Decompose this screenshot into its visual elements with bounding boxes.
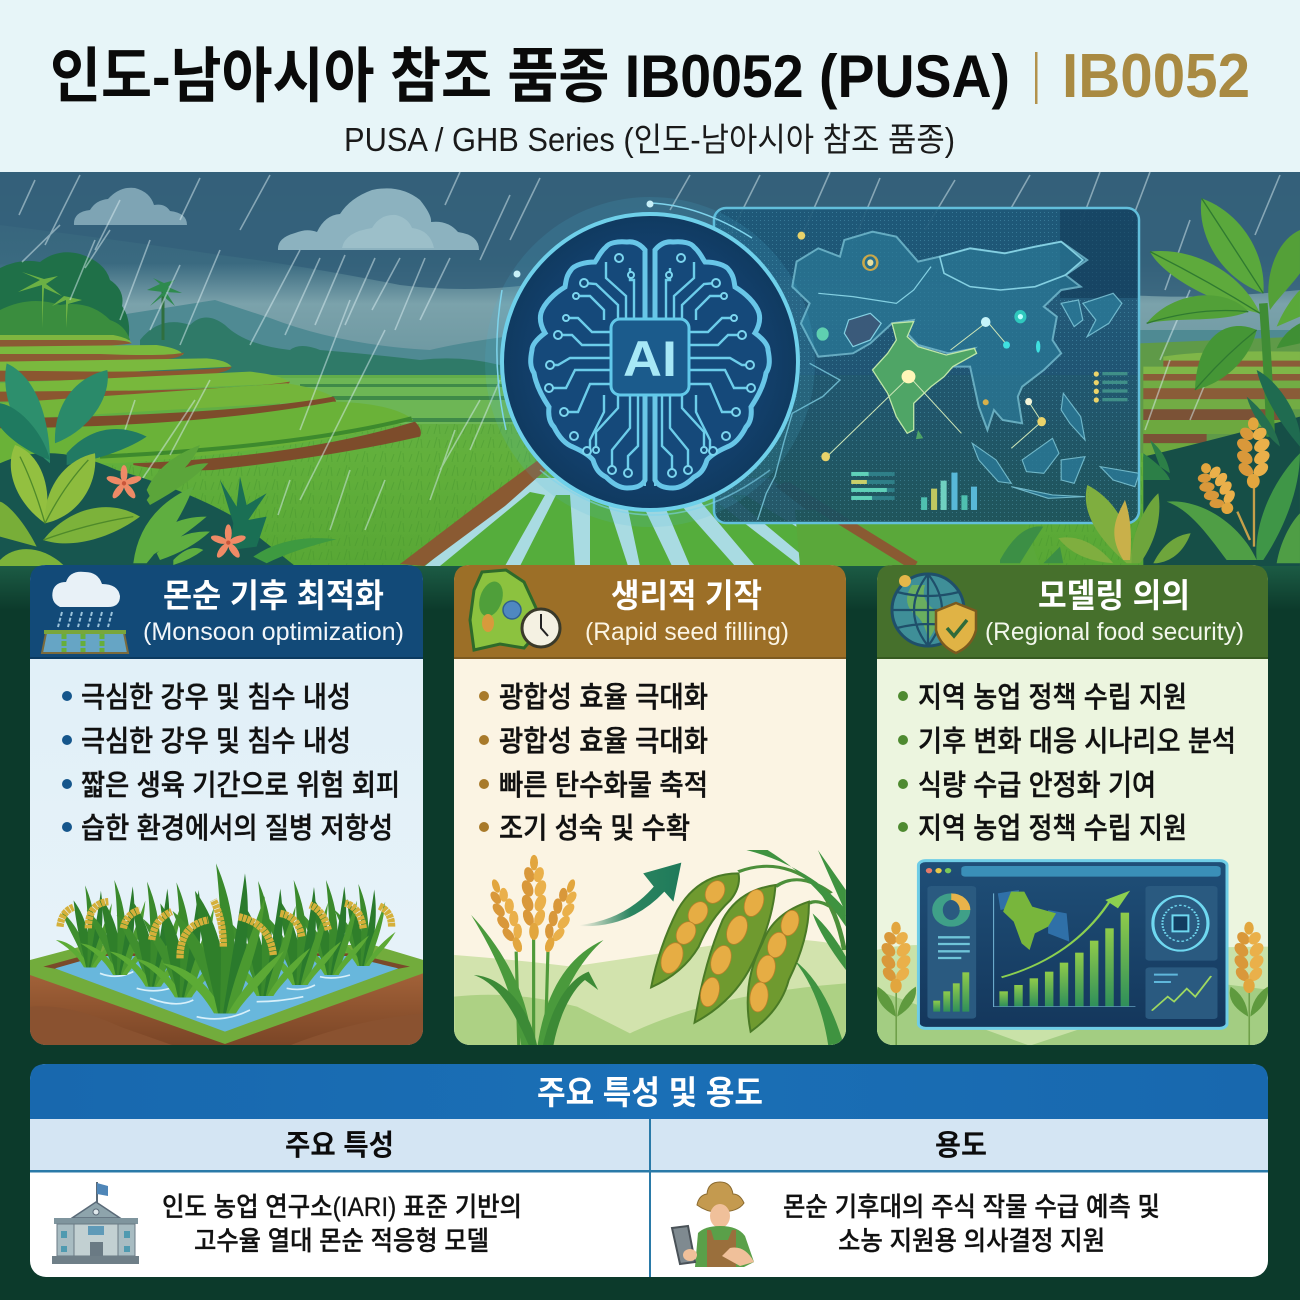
pod seeds bbox=[657, 877, 802, 1013]
rain bbox=[19, 172, 1280, 530]
panel header bbox=[454, 565, 846, 658]
icon: globe with shield bbox=[892, 574, 976, 653]
text: uses bbox=[783, 1192, 1160, 1256]
icon: farmer with tablet bbox=[672, 1182, 754, 1267]
side wheat ears bbox=[879, 922, 1266, 993]
bullet list: 조기 성숙 및 수확 bbox=[499, 812, 690, 845]
bullet list bbox=[62, 681, 400, 845]
bullet list: 짧은 생육 기간으로 위험 회피 bbox=[81, 769, 400, 802]
AI chip: AI bbox=[623, 331, 677, 387]
side wheat stems bbox=[877, 987, 1268, 1047]
bushes in front of map bbox=[1000, 485, 1191, 563]
dark cloud band bbox=[266, 261, 1300, 297]
network links bbox=[827, 322, 1042, 457]
left tree cluster bbox=[0, 252, 182, 342]
stalk and leaves bbox=[738, 866, 844, 950]
wheat ears bbox=[490, 854, 576, 952]
panel header bbox=[30, 565, 423, 658]
table: key traits and uses bbox=[30, 1064, 1268, 1277]
text: key traits: 고수율 열대 몬순 적응형 모델 bbox=[194, 1226, 489, 1256]
panel subtitle: (Regional food security) bbox=[985, 618, 1244, 646]
AI chip bbox=[611, 319, 689, 395]
clouds bbox=[74, 188, 479, 250]
hero scene bbox=[0, 172, 1300, 575]
panel: physiological mechanism bbox=[454, 565, 846, 1047]
bullet list bbox=[479, 681, 708, 845]
table title bar: 주요 특성 및 용도 bbox=[537, 1074, 763, 1111]
left foreground foliage bbox=[0, 363, 337, 570]
illustration: flooded rice paddy bbox=[30, 863, 423, 1047]
mini line chart bbox=[1154, 975, 1178, 982]
illustration: grain and seed pods bbox=[454, 850, 846, 1047]
bullet list bbox=[898, 681, 1236, 845]
title divider bbox=[1035, 52, 1038, 104]
title: 인도-남아시아 참조 품종 IB0052 (PUSA) bbox=[50, 43, 1010, 110]
bullet list: 식량 수급 안정화 기여 bbox=[918, 769, 1156, 802]
fade under hero bbox=[0, 560, 1300, 610]
bullet list: 기후 변화 대응 시나리오 분석 bbox=[918, 725, 1236, 758]
text: key traits bbox=[162, 1192, 522, 1256]
panel subtitle: (Rapid seed filling) bbox=[585, 618, 789, 646]
title code: IB0052 bbox=[1062, 42, 1250, 111]
bullet list: 습한 환경에서의 질병 저항성 bbox=[81, 812, 393, 845]
mini india map bbox=[998, 890, 1069, 942]
mini bar chart bbox=[921, 473, 977, 510]
far tree line bbox=[140, 318, 500, 375]
AI brain orb bbox=[485, 197, 815, 527]
bullet list: 광합성 효율 극대화 bbox=[499, 725, 708, 758]
mini bar list bbox=[851, 472, 895, 500]
panel subtitle: (Monsoon optimization) bbox=[143, 618, 404, 646]
bullet list: 지역 농업 정책 수립 지원 bbox=[918, 681, 1187, 714]
main bar chart bbox=[994, 893, 1135, 1007]
map nodes bbox=[797, 232, 1046, 461]
panel heading: 생리적 기작 bbox=[611, 577, 762, 614]
dashboard screen bbox=[918, 861, 1227, 1028]
mini brain bbox=[1153, 896, 1208, 951]
panel header bbox=[877, 565, 1268, 658]
green rice field bbox=[0, 375, 1144, 566]
bullet list: 극심한 강우 및 침수 내성 bbox=[81, 725, 351, 758]
right paddy terraces bbox=[1140, 337, 1300, 460]
header band bbox=[0, 0, 1300, 172]
table title bar bbox=[30, 1064, 1268, 1119]
text: uses: 몬순 기후대의 주식 작물 수급 예측 및 bbox=[783, 1192, 1160, 1222]
text: uses: 소농 지원용 의사결정 지원 bbox=[838, 1226, 1105, 1256]
panel: monsoon optimization bbox=[30, 565, 423, 1047]
asia map outlines bbox=[758, 232, 1139, 520]
icon: rain cloud over paddy bbox=[42, 572, 128, 653]
growth arrow bbox=[580, 863, 681, 926]
map panel bbox=[714, 208, 1139, 523]
distant paddy rows bbox=[280, 378, 514, 424]
bullet list: 빠른 탄수화물 축적 bbox=[499, 769, 708, 802]
icon: research institute building bbox=[52, 1182, 139, 1264]
map mini legend bbox=[1094, 371, 1128, 403]
small bars bbox=[933, 1001, 940, 1012]
bullet list: 지역 농업 정책 수립 지원 bbox=[918, 812, 1187, 845]
bullet list: 극심한 강우 및 침수 내성 bbox=[81, 681, 351, 714]
subtitle: PUSA / GHB Series (인도-남아시아 참조 품종) bbox=[344, 121, 955, 158]
donut chart bbox=[937, 897, 965, 923]
central irrigated rows bbox=[400, 455, 1040, 566]
distant mountains bbox=[114, 300, 1290, 375]
brain hemispheres bbox=[531, 242, 769, 488]
pod husks bbox=[651, 873, 739, 987]
icon: plant cell and clock bbox=[470, 570, 560, 650]
right foreground foliage bbox=[1143, 198, 1300, 567]
legend rows bbox=[938, 937, 970, 958]
column header row: 용도 bbox=[935, 1130, 987, 1162]
column header row: 주요 특성 bbox=[285, 1129, 394, 1162]
wheat leaves bbox=[471, 915, 603, 1047]
column header row bbox=[30, 1119, 1268, 1172]
panel heading: 몬순 기후 최적화 bbox=[163, 577, 384, 614]
stormy sky bbox=[0, 172, 1300, 350]
bullet list: 광합성 효율 극대화 bbox=[499, 681, 708, 714]
terraces bbox=[0, 335, 421, 470]
text: key traits: 인도 농업 연구소(IARI) 표준 기반의 bbox=[162, 1192, 522, 1222]
illustration: analytics dashboard bbox=[877, 861, 1270, 1047]
growth trend arrow bbox=[1002, 898, 1112, 977]
panel heading: 모델링 의의 bbox=[1038, 577, 1190, 614]
panel: modeling significance bbox=[877, 565, 1270, 1047]
india highlight bbox=[872, 322, 977, 433]
map frame bbox=[714, 208, 1139, 523]
